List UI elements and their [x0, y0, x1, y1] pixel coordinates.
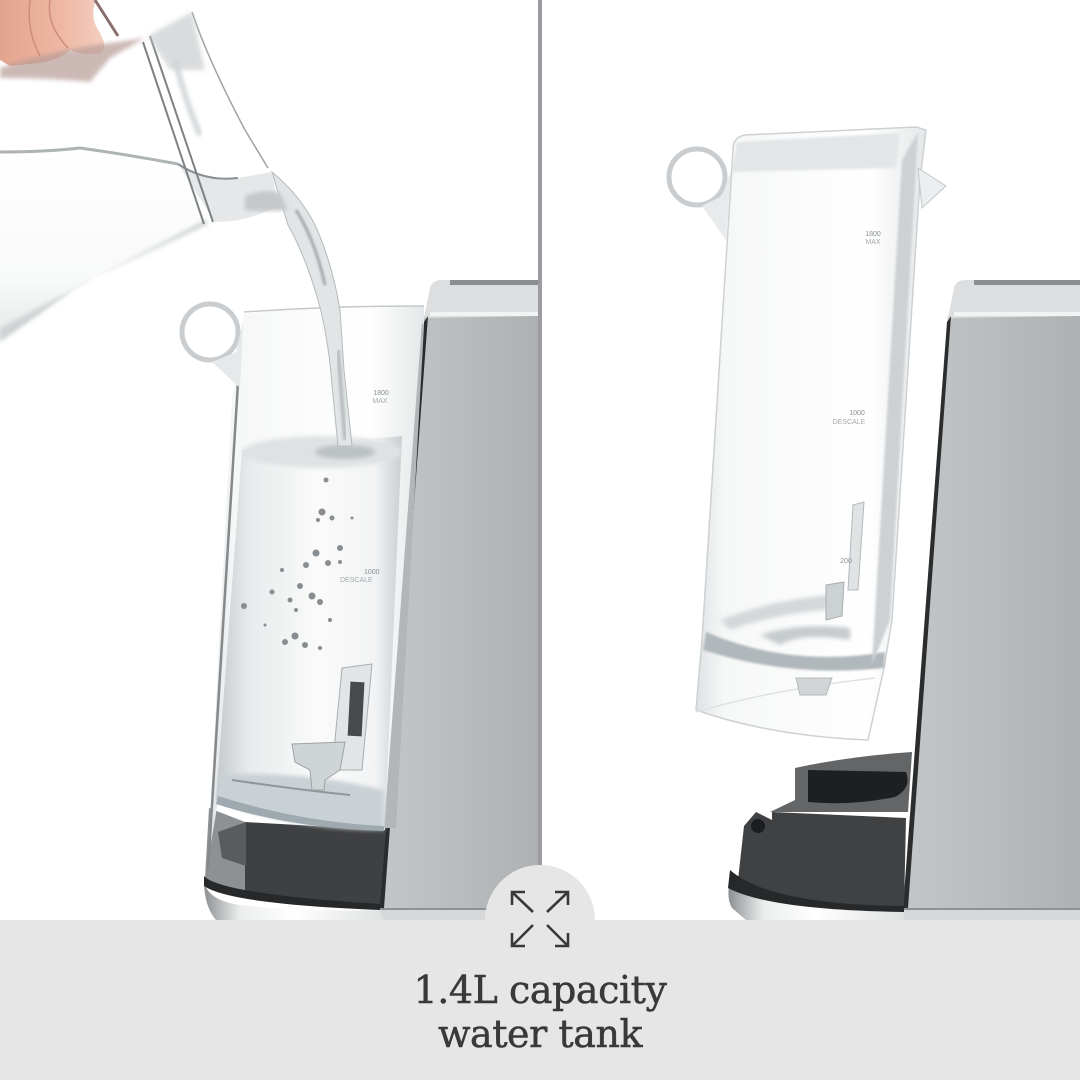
tank left: DESCALE [340, 577, 373, 584]
icon badge: expand arrows [485, 865, 595, 975]
tank markings: 1800 [865, 231, 881, 238]
inner valve [826, 582, 844, 620]
inner valve [332, 664, 372, 770]
detached tank: 1000 [849, 410, 865, 417]
water stream [272, 172, 352, 446]
machine body right [903, 280, 1080, 920]
hand [0, 0, 145, 82]
caption band [0, 920, 1080, 1080]
tank left: 1000 [364, 569, 380, 576]
left panel: pouring water into tank [0, 0, 538, 920]
machine base right [728, 752, 912, 920]
detached tank: MAX [865, 239, 881, 246]
tank left [182, 304, 424, 870]
caption: water tank [438, 1012, 642, 1056]
tank handle ring [182, 304, 238, 360]
caption: 1.4L capacity [414, 968, 666, 1012]
machine body left [379, 280, 538, 920]
detached tank [669, 127, 946, 740]
detached tank: 200 [840, 558, 852, 565]
glass jug [0, 12, 288, 342]
caption [414, 968, 668, 1056]
detached tank: DESCALE [833, 419, 866, 426]
tank left: MAX [372, 398, 388, 405]
tank handle ring [669, 149, 725, 205]
right panel: removed water tank [669, 127, 1080, 920]
bubbles [241, 478, 354, 650]
panel divider [538, 0, 542, 920]
machine base left [204, 808, 386, 920]
tank markings: 1800 [373, 390, 389, 397]
